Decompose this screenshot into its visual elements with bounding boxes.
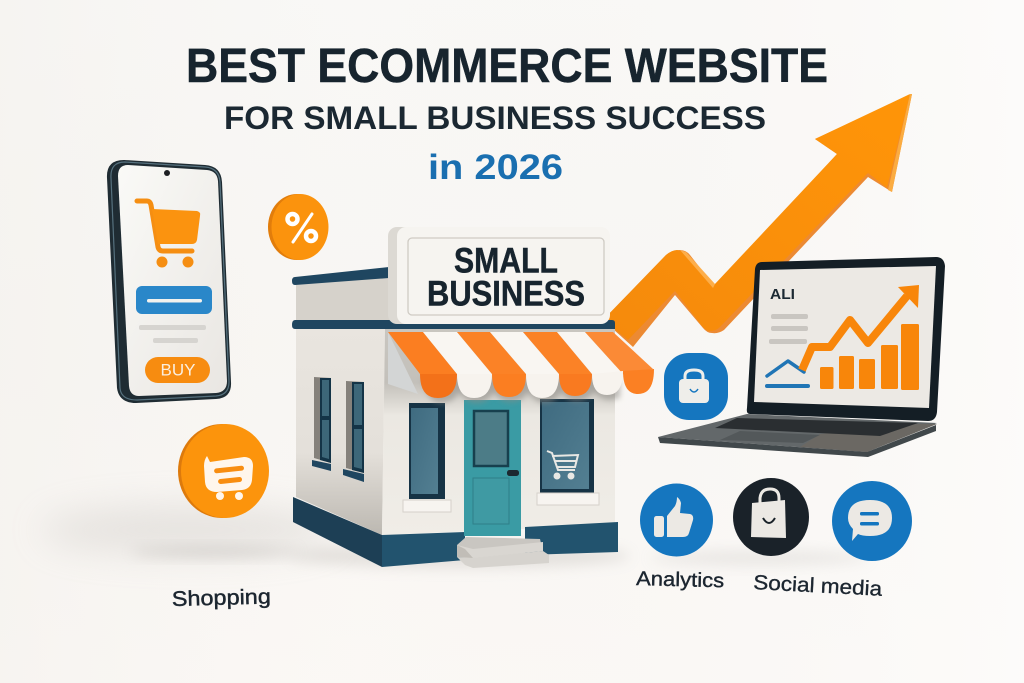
floor shadow: left of store <box>40 506 340 557</box>
phone screen <box>118 165 227 396</box>
icon: shopping bag badge <box>733 478 809 556</box>
icon: chat badge <box>832 481 912 561</box>
blue button <box>136 286 212 314</box>
left front window <box>403 403 451 512</box>
laptop screen bezel <box>747 257 945 421</box>
awning <box>388 332 654 403</box>
label: Shopping: Shopping <box>172 585 271 611</box>
side wall <box>296 329 385 535</box>
base right <box>525 522 618 555</box>
growth arrow <box>603 94 912 347</box>
shop sign <box>388 227 610 324</box>
steps <box>457 537 549 568</box>
keyboard <box>715 418 918 436</box>
icon: thumbs up badge <box>640 484 713 556</box>
right front window <box>537 399 599 505</box>
upper wall <box>296 276 392 322</box>
store ground shadow <box>290 544 630 568</box>
storefront <box>290 227 654 568</box>
placeholder text lines <box>139 325 206 343</box>
base side <box>293 497 382 567</box>
title <box>186 40 828 187</box>
upper cornice <box>292 267 392 285</box>
phone <box>107 160 231 403</box>
mid cornice <box>292 320 615 329</box>
blue mini chart <box>767 361 808 386</box>
door <box>464 400 521 536</box>
shop sign: SMALL <box>454 240 558 280</box>
phone body <box>107 160 231 403</box>
screen text lines <box>769 314 808 344</box>
icon: cart on phone <box>137 201 200 268</box>
front wall <box>382 329 615 535</box>
icon: shopping cart badge <box>178 424 269 518</box>
heading line 3: in 2026 <box>428 148 563 187</box>
buy button <box>145 357 210 383</box>
bar chart <box>820 324 919 390</box>
icon: window cart <box>547 451 578 478</box>
trackpad <box>720 431 820 443</box>
label: Analytics: Analytics <box>636 568 724 592</box>
buy button: BUY <box>161 360 195 380</box>
camera <box>164 170 170 176</box>
screen trend arrow <box>802 285 919 370</box>
heading line 2: FOR SMALL BUSINESS SUCCESS <box>224 100 766 136</box>
heading line 1: BEST ECOMMERCE WEBSITE <box>186 40 828 93</box>
side windows <box>312 377 364 482</box>
floor shadow: right icons <box>650 551 870 565</box>
base front <box>382 532 465 567</box>
laptop <box>658 257 945 457</box>
icon: percent badge <box>268 194 328 260</box>
label: Social media: Social media <box>753 571 883 601</box>
screen label: ALI <box>770 287 795 303</box>
laptop base <box>658 414 937 452</box>
shop sign: BUSINESS <box>427 274 585 314</box>
laptop screen <box>754 266 936 408</box>
icon: lock tile <box>664 353 728 420</box>
